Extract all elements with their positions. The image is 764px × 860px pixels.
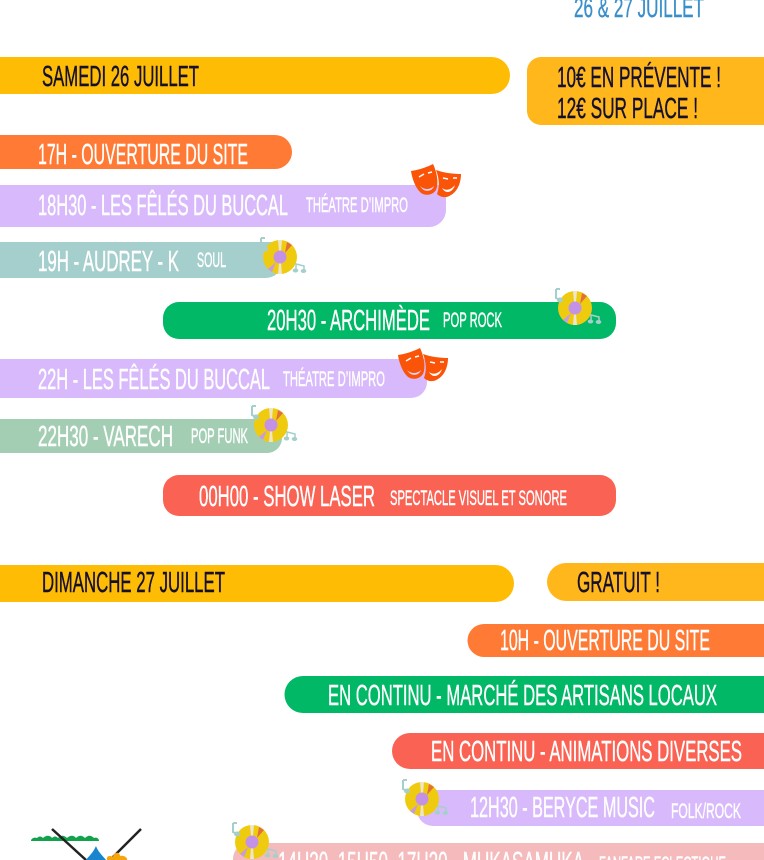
panel: 19h audrey-k: 19H - AUDREY - K	[38, 246, 179, 278]
icon: theatre masks	[398, 348, 448, 381]
panel: 20h30 archimède: 20H30 - ARCHIMÈDE	[267, 304, 430, 337]
icon: vinyl disc	[403, 780, 448, 816]
panel: 22h les fêlés du buccal: THÉATRE D’IMPRO	[283, 368, 385, 391]
panel: saturday heading: SAMEDI 26 JUILLET	[42, 61, 199, 93]
icon: vinyl disc	[556, 289, 601, 325]
panel: 20h30 archimède: POP ROCK	[443, 309, 502, 332]
panel: 22h30 varech: 22H30 - VARECH	[38, 421, 173, 453]
panel: 18h30 les fêlés du buccal	[0, 185, 446, 227]
icon: vinyl disc	[252, 406, 297, 442]
panel: sunday heading: DIMANCHE 27 JUILLET	[42, 567, 225, 599]
panel: 18h30 les fêlés du buccal: THÉATRE D’IMPRO	[306, 194, 408, 217]
panel: sunday price	[547, 563, 764, 601]
panel: 00h00 show laser	[163, 475, 616, 516]
icon: theatre masks	[411, 164, 461, 197]
panel: 22h les fêlés du buccal: 22H - LES FÊLÉS DU BUCCAL	[38, 363, 270, 396]
panel: sunday heading	[0, 565, 514, 602]
panel: 22h30 varech: POP FUNK	[191, 425, 248, 448]
icon: vinyl disc	[261, 238, 306, 274]
panel: 17h opening: 17H - OUVERTURE DU SITE	[38, 139, 248, 171]
panel: 00h00 show laser: 00H00 - SHOW LASER	[199, 481, 375, 513]
panel: 20h30 archimède	[163, 302, 616, 339]
panel: 17h opening	[0, 135, 292, 171]
panel: 00h00 show laser: SPECTACLE VISUEL ET SONORE	[390, 487, 567, 510]
logo: festival emblem	[31, 829, 141, 860]
panel: sunday price: GRATUIT !	[577, 567, 660, 599]
panel: saturday prices	[527, 57, 764, 125]
panel: 18h30 les fêlés du buccal: 18H30 - LES FÊLÉS DU BUCCAL	[38, 189, 288, 222]
panel: 19h audrey-k: SOUL	[197, 249, 226, 272]
panel: saturday heading	[0, 57, 510, 94]
icon: vinyl disc	[233, 823, 278, 859]
panel: mukasamuka	[233, 843, 764, 860]
